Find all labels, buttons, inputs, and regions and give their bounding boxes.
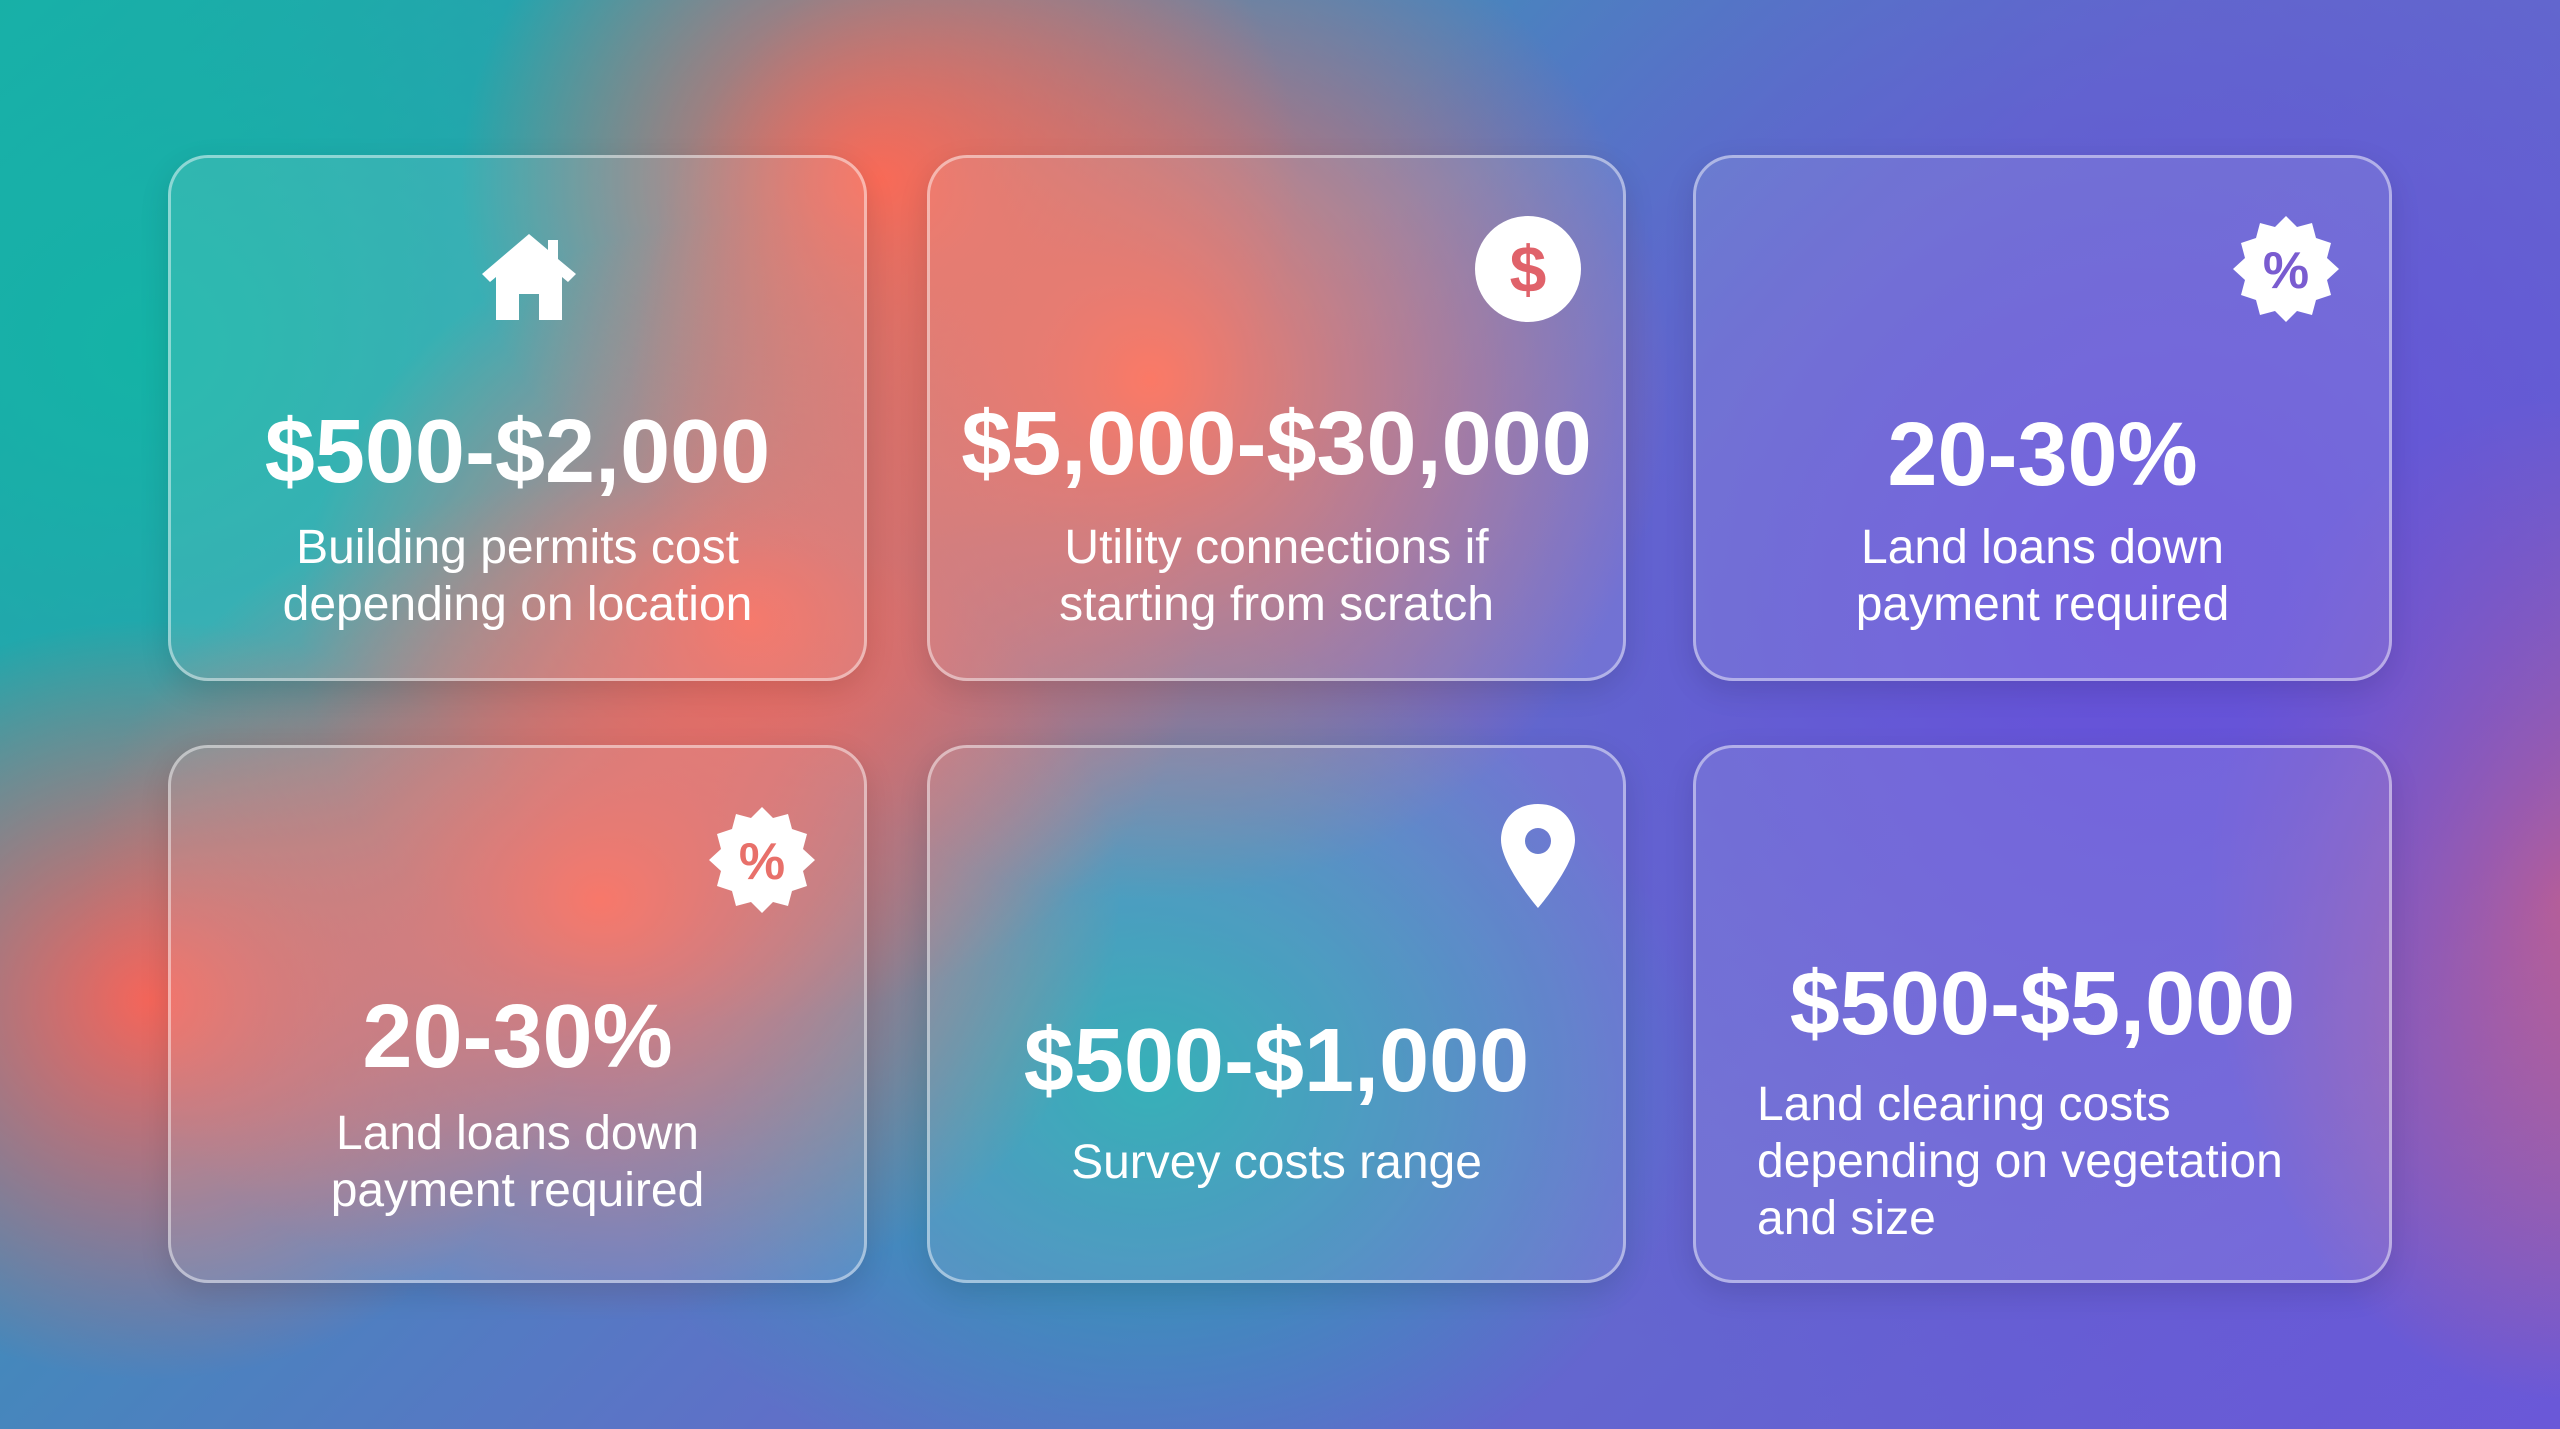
icon: percent badge: [2233, 216, 2339, 322]
text: payment required: [331, 1164, 704, 1217]
icon: percent badge: %: [2263, 242, 2309, 300]
text: starting from scratch: [1059, 578, 1494, 631]
icon: dollar: $: [1510, 232, 1546, 306]
text: Land loans down: [336, 1107, 699, 1160]
icon: location pin: [1501, 804, 1575, 908]
number: 20-30%: [362, 987, 673, 1087]
text: Survey costs range: [1071, 1136, 1482, 1189]
text: depending on vegetation: [1757, 1135, 2283, 1188]
icon: percent badge: [709, 807, 815, 913]
text: [283, 521, 752, 631]
card: survey: [927, 745, 1626, 1283]
text: depending on location: [283, 578, 752, 631]
number: 20-30%: [1887, 405, 2198, 505]
text: [331, 1107, 704, 1217]
icon: house: [482, 234, 576, 320]
text: [1757, 1078, 2283, 1245]
text: [1059, 521, 1494, 631]
text: Land loans down: [1861, 521, 2224, 574]
number: $500-$2,000: [265, 402, 770, 502]
icon: dollar: [1475, 216, 1581, 322]
text: and size: [1757, 1192, 1936, 1245]
number: $500-$5,000: [1790, 954, 2295, 1054]
card: land loans: [1693, 155, 2392, 681]
number: $500-$1,000: [1024, 1011, 1529, 1111]
text: Utility connections if: [1064, 521, 1489, 574]
card: utility connections: [927, 155, 1626, 681]
icon: percent badge: %: [739, 833, 785, 891]
number: $5,000-$30,000: [961, 394, 1592, 494]
card: land clearing: [1693, 745, 2392, 1283]
card: building permits: [168, 155, 867, 681]
text: Building permits cost: [296, 521, 739, 574]
card: land loans 2: [168, 745, 867, 1283]
text: payment required: [1856, 578, 2229, 631]
text: [1856, 521, 2229, 631]
text: Land clearing costs: [1757, 1078, 2171, 1131]
